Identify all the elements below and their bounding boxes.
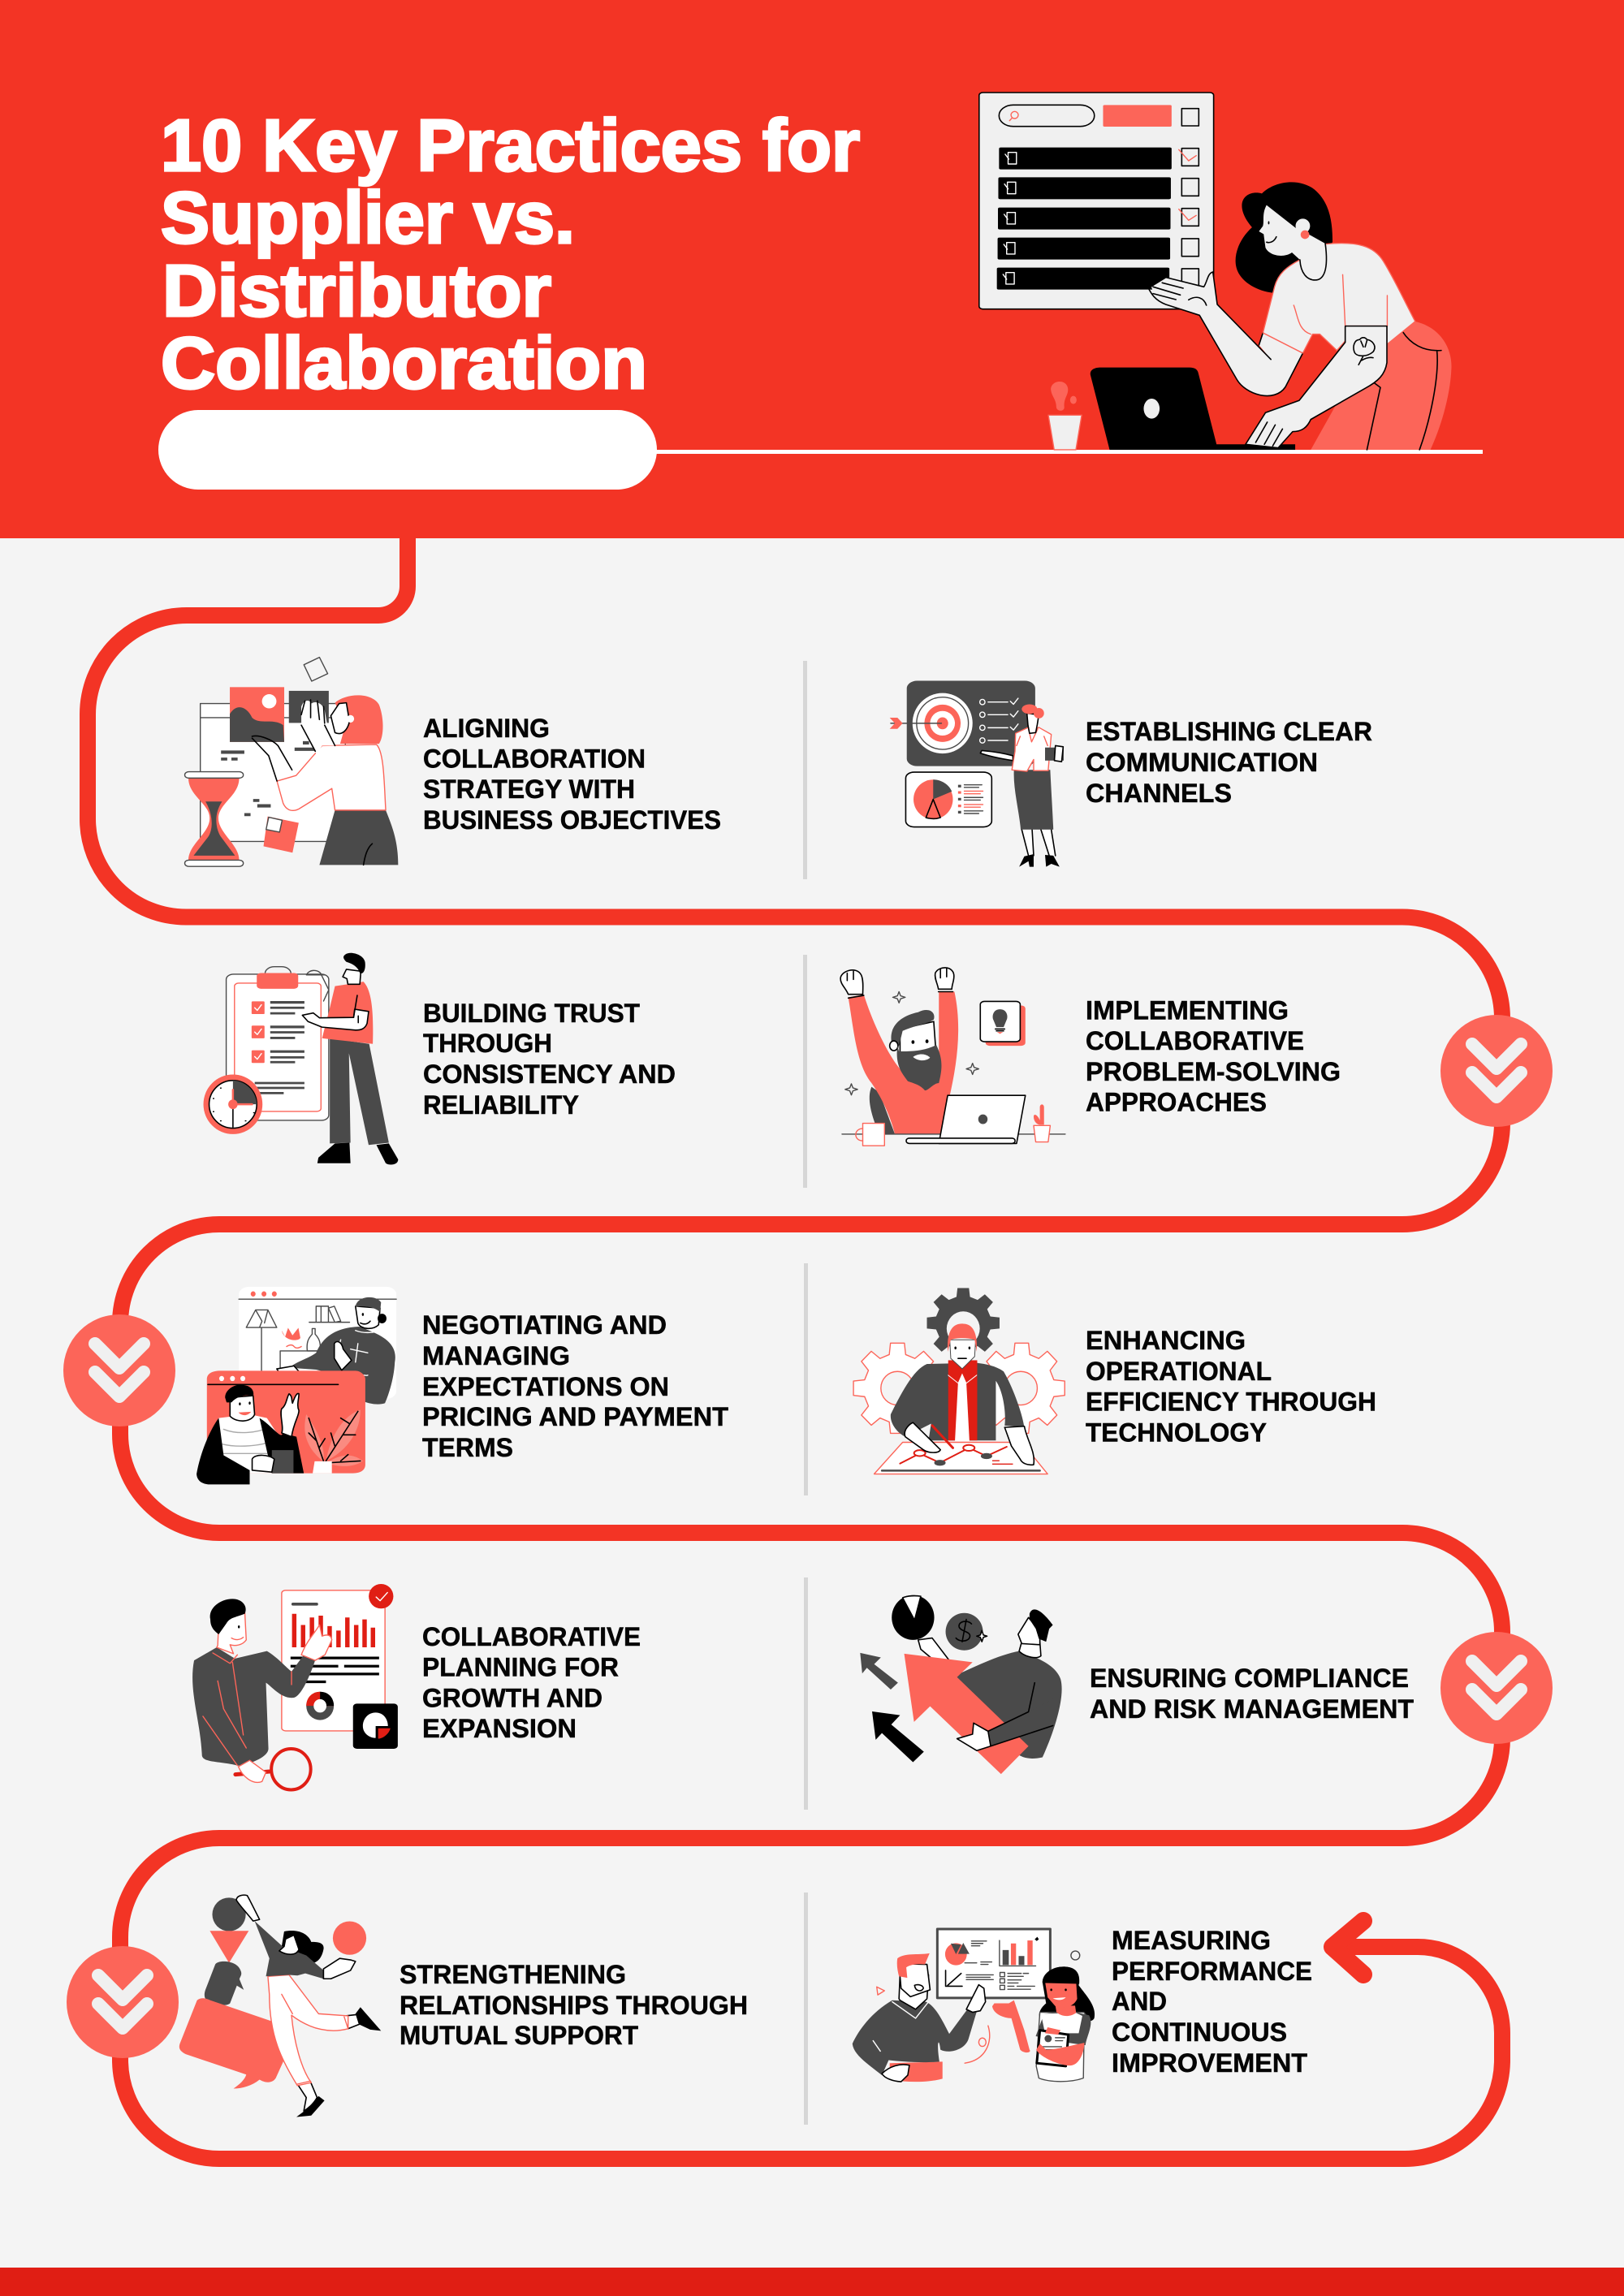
text: step 6: OPERATIONAL: [1086, 1357, 1272, 1386]
illustration: woman with checklist panel and laptop: [979, 93, 1452, 450]
text: step 5: MANAGING: [422, 1341, 570, 1370]
panel: establishing clear communication channels: [890, 681, 1372, 867]
panel: enhancing operational efficiency: [853, 1288, 1376, 1474]
text: step 3: [423, 999, 676, 1120]
text: step 9: STRENGTHENING: [400, 1960, 626, 1989]
panel: collaborative planning: [192, 1584, 641, 1789]
text: step 2: ESTABLISHING CLEAR: [1086, 717, 1372, 746]
text: step 1: [423, 714, 721, 835]
text: step 3: BUILDING TRUST: [423, 999, 640, 1028]
text: step 5: TERMS: [422, 1433, 513, 1462]
text: step 9: MUTUAL SUPPORT: [400, 2021, 638, 2050]
title: [161, 106, 860, 404]
text: step 2: CHANNELS: [1086, 779, 1232, 808]
text: step 4: IMPLEMENTING: [1086, 995, 1289, 1025]
text: step 10: MEASURING: [1112, 1926, 1271, 1955]
title: Collaboration: [161, 323, 647, 404]
badge: chevrons left row 3: [63, 1314, 175, 1426]
header table line: [655, 450, 1483, 454]
text: step 10: IMPROVEMENT: [1112, 2048, 1307, 2078]
text: step 1: STRATEGY WITH: [423, 775, 635, 804]
text: step 1: BUSINESS OBJECTIVES: [423, 805, 721, 835]
laptop: [1091, 368, 1295, 450]
text: step 7: EXPANSION: [422, 1714, 577, 1743]
text: step 8: AND RISK MANAGEMENT: [1090, 1694, 1414, 1724]
icon: man with checklist clipboard and clock: [204, 953, 398, 1165]
panel: aligning collaboration strategy: [185, 658, 721, 866]
panel: measuring performance and continuous improvement: [853, 1926, 1312, 2082]
footer band: [0, 2268, 1624, 2296]
icon: two colleagues reviewing dashboard: [853, 1929, 1095, 2082]
woman figure: [1148, 182, 1452, 450]
text: step 10: PERFORMANCE: [1112, 1957, 1312, 1986]
title: Supplier vs.: [161, 178, 575, 259]
text: step 5: PRICING AND PAYMENT: [422, 1402, 728, 1431]
winding red connector path: [88, 536, 1502, 2159]
text: step 10: [1112, 1926, 1312, 2078]
text: step 3: RELIABILITY: [423, 1090, 579, 1120]
text: step 4: [1086, 995, 1341, 1117]
icon: person arranging board with hourglass: [185, 658, 398, 866]
badge: chevrons right row 2: [1440, 1015, 1553, 1127]
badge: chevrons left row 5: [67, 1946, 179, 2058]
text: step 4: COLLABORATIVE: [1086, 1026, 1304, 1055]
text: step 7: COLLABORATIVE: [422, 1622, 641, 1651]
panel: negotiating and managing expectations: [197, 1287, 728, 1484]
text: step 3: THROUGH: [423, 1029, 552, 1058]
title: Distributor: [162, 251, 551, 332]
checklist panel: [979, 93, 1214, 309]
text: step 9: RELATIONSHIPS THROUGH: [400, 1991, 748, 2020]
icon: bearded man celebrating at laptop: [840, 968, 1065, 1146]
panel: ensuring compliance and risk management: [860, 1595, 1414, 1774]
text: step 7: PLANNING FOR: [422, 1653, 619, 1682]
text: step 5: NEGOTIATING AND: [422, 1310, 667, 1340]
arrow head at end of path: [1332, 1921, 1363, 1974]
text: step 8: ENSURING COMPLIANCE: [1090, 1664, 1409, 1693]
text: step 4: APPROACHES: [1086, 1088, 1267, 1117]
panel: implementing collaborative problem-solving: [840, 968, 1341, 1146]
panel: building trust through consistency: [204, 953, 676, 1165]
text: step 1: ALIGNING: [423, 714, 550, 743]
text: step 10: AND: [1112, 1987, 1167, 2016]
text: step 6: ENHANCING: [1086, 1326, 1246, 1355]
text: step 7: GROWTH AND: [422, 1684, 603, 1713]
coffee cup and steam: [1048, 382, 1082, 450]
text: step 4: PROBLEM-SOLVING: [1086, 1057, 1341, 1086]
icon: woman presenting target board: [890, 681, 1064, 867]
text: step 6: EFFICIENCY THROUGH: [1086, 1387, 1376, 1416]
text: step 9: [400, 1960, 748, 2050]
icon: woman stacking shapes over speech bubble: [179, 1895, 381, 2117]
header band: [0, 0, 1624, 538]
icon: businessman with gears and graph: [853, 1288, 1065, 1474]
icon: two people in video call windows: [197, 1287, 396, 1484]
text: step 1: COLLABORATION: [423, 744, 646, 773]
text: step 7: [422, 1622, 641, 1743]
text: step 5: [422, 1310, 728, 1462]
text: step 2: COMMUNICATION: [1086, 748, 1318, 777]
text: step 3: CONSISTENCY AND: [423, 1060, 676, 1089]
icon: man presenting bar chart with magnifier: [192, 1584, 398, 1789]
text: step 5: EXPECTATIONS ON: [422, 1372, 669, 1401]
text: step 6: TECHNOLOGY: [1086, 1418, 1267, 1447]
text: step 10: CONTINUOUS: [1112, 2018, 1287, 2047]
icon: man carrying upward arrow: [860, 1595, 1062, 1774]
text: step 6: [1086, 1326, 1376, 1447]
panel: strengthening relationships: [179, 1895, 748, 2117]
title: 10 Key Practices for: [161, 106, 860, 187]
badge: chevrons right row 4: [1440, 1632, 1553, 1744]
white pill under title: [158, 410, 657, 490]
text: step 2: [1086, 717, 1372, 808]
text: step 8: [1090, 1664, 1414, 1724]
